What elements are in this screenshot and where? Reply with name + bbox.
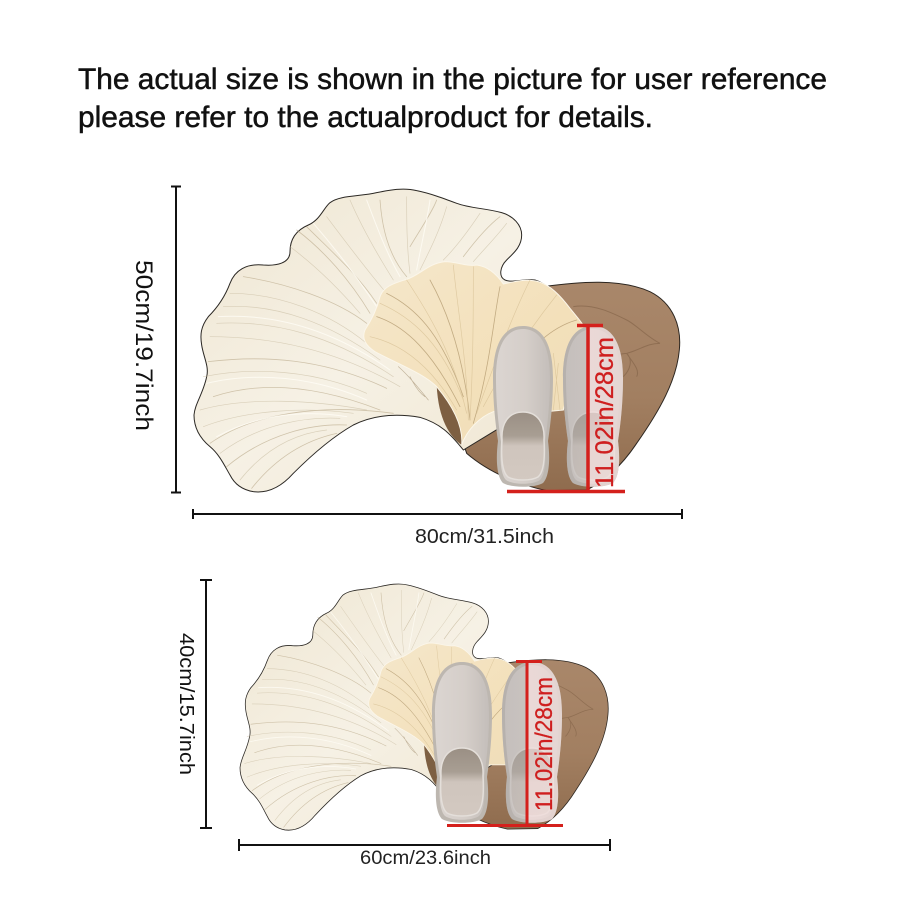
height dimension: small	[175, 580, 212, 828]
height dimension: large	[130, 186, 181, 493]
left slipper	[493, 326, 553, 487]
title line 1: The actual size is shown in the picture for user reference	[78, 63, 827, 96]
width label: 60cm/23.6inch	[360, 847, 491, 869]
title	[78, 63, 827, 134]
right slipper	[502, 662, 562, 823]
horizontal dimension line	[239, 839, 610, 851]
small rug shoe length marker	[447, 661, 563, 826]
vertical dimension line	[171, 186, 181, 493]
height label: 50cm/19.7inch	[130, 260, 157, 431]
width dimension: large	[193, 509, 682, 548]
large rug shoe length marker	[507, 325, 625, 492]
right slipper	[563, 326, 623, 487]
height label: 40cm/15.7inch	[175, 633, 197, 775]
title line 2: please refer to the actualproduct for details.	[78, 101, 653, 134]
width label: 80cm/31.5inch	[415, 525, 554, 548]
large size rug (80 x 50 cm)	[194, 189, 680, 492]
shoe length label: 11.02in/28cm	[591, 337, 619, 488]
left slipper	[432, 662, 492, 823]
shoe length label: 11.02in/28cm	[531, 677, 558, 811]
slipper highlight overlay	[563, 326, 623, 487]
large rug slippers	[493, 326, 623, 487]
slipper highlight overlay	[502, 662, 562, 823]
red measure lines	[447, 661, 563, 826]
vertical dimension line	[200, 580, 212, 828]
small rug slippers	[432, 662, 562, 823]
small size rug (60 x 40 cm)	[240, 584, 608, 830]
horizontal dimension line	[193, 509, 682, 519]
red measure lines	[507, 325, 625, 492]
width dimension: small	[239, 839, 610, 869]
